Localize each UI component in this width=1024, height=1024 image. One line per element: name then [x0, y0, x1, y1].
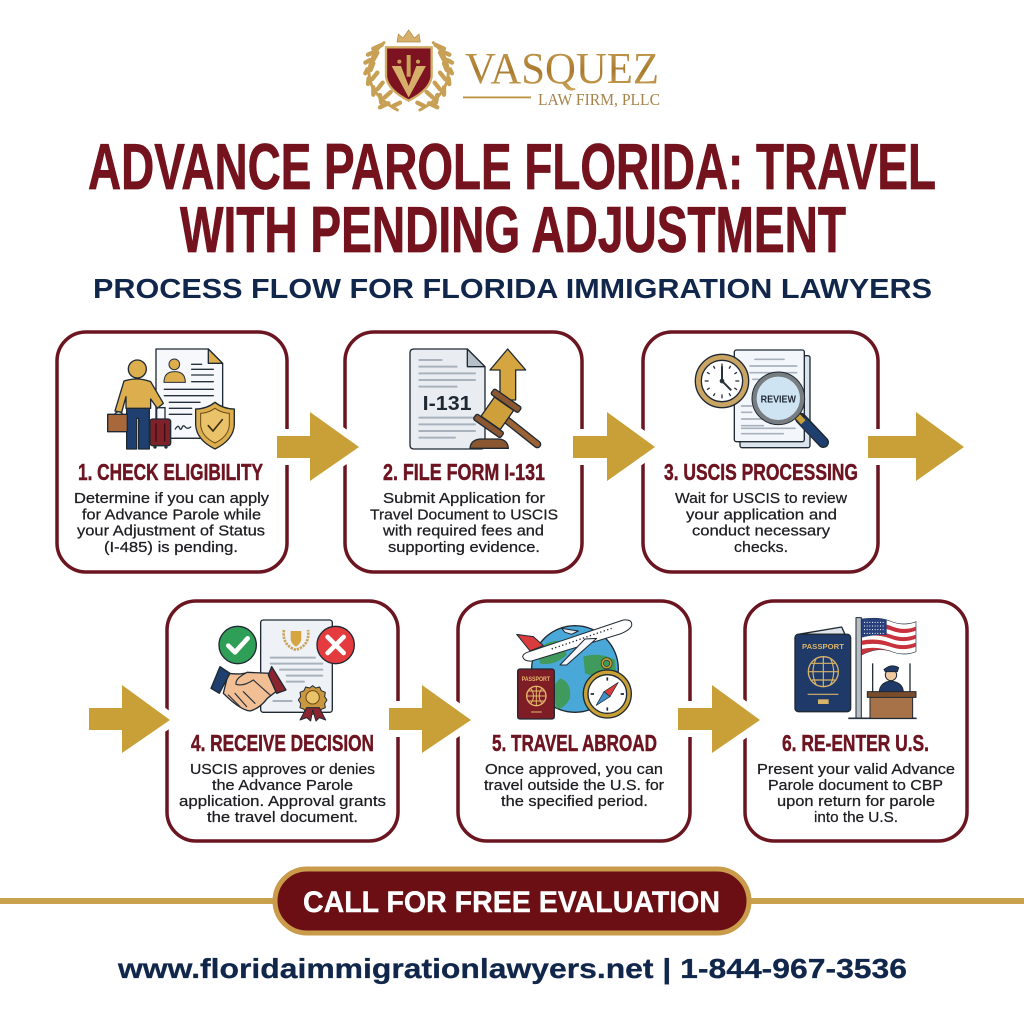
arrow: step 5 to 6	[678, 685, 760, 753]
heading: 4. RECEIVE DECISION	[191, 730, 374, 756]
description: USCIS approves or denies	[190, 761, 375, 778]
arrow: step 4 to 5	[389, 685, 471, 753]
subtitle: PROCESS FLOW FOR FLORIDA IMMIGRATION LAWYERS	[93, 273, 932, 304]
description: for Advance Parole while	[82, 506, 261, 524]
icon: clock, documents and magnifier	[695, 350, 823, 448]
description: your Adjustment of Status	[77, 522, 265, 540]
title	[88, 130, 936, 266]
panel: step 2 file form I-131	[345, 332, 582, 572]
description: conduct necessary	[692, 522, 831, 540]
divider line behind call to action	[0, 898, 1024, 904]
icon: clock, documents and magnifier: REVIEW	[761, 394, 796, 405]
icon: passport, flag and border officer: PASSPORT	[802, 642, 845, 651]
call to action button	[275, 869, 749, 933]
logo: Vasquez Law Firm	[365, 30, 660, 110]
arrow: step 2 to 3	[573, 412, 655, 481]
description: Travel Document to USCIS	[370, 506, 558, 524]
description: the specified period.	[501, 793, 648, 810]
description: upon return for parole	[777, 793, 935, 810]
icon: globe, airplane, passport and compass	[517, 620, 632, 719]
icon: form I-131, upload arrow and gavel: I-131	[423, 392, 472, 415]
logo wordmark: VASQUEZ	[465, 44, 659, 93]
description	[484, 761, 664, 810]
description	[757, 761, 955, 826]
description: checks.	[734, 539, 788, 556]
icon: passport, flag and border officer	[795, 618, 917, 718]
panel: step 1 check eligibility	[57, 332, 287, 572]
description: the travel document.	[207, 809, 358, 826]
description: supporting evidence.	[388, 539, 540, 556]
description: (I-485) is pending.	[104, 539, 238, 556]
description: application. Approval grants	[179, 793, 386, 810]
description: your application and	[686, 506, 837, 524]
logo emblem: crest with laurels	[365, 30, 452, 110]
arrow: step 3 onward	[868, 412, 964, 481]
icon: form I-131, upload arrow and gavel	[410, 349, 537, 449]
icon: decision document, handshake, approve and deny marks	[211, 620, 354, 721]
description: with required fees and	[382, 522, 544, 540]
heading: 6. RE-ENTER U.S.	[782, 730, 929, 756]
panel: step 6 re-enter U.S.	[745, 601, 967, 841]
description: into the U.S.	[814, 809, 898, 826]
panel: step 4 receive decision	[167, 601, 398, 841]
description: Present your valid Advance	[757, 761, 955, 778]
footer contact line: www.floridaimmigrationlawyers.net | 1-844-967-3536	[117, 953, 907, 984]
call to action button: CALL FOR FREE EVALUATION	[303, 886, 720, 919]
logo tagline: LAW FIRM, PLLC	[538, 90, 660, 109]
description: Submit Application for	[383, 490, 545, 507]
icon: traveler with document and shield	[108, 349, 234, 449]
heading: 2. FILE FORM I-131	[383, 459, 545, 485]
description: travel outside the U.S. for	[484, 777, 664, 794]
description	[74, 490, 270, 556]
description: the Advance Parole	[212, 777, 353, 794]
description: Once approved, you can	[485, 761, 663, 778]
description: Parole document to CBP	[768, 777, 943, 794]
icon: globe, airplane, passport and compass: PASSPORT	[522, 676, 550, 683]
panel: step 5 travel abroad	[458, 601, 690, 841]
heading: 3. USCIS PROCESSING	[664, 459, 858, 485]
heading: 1. CHECK ELIGIBILITY	[78, 459, 263, 485]
arrow: into step 4	[89, 685, 170, 753]
description	[370, 490, 558, 556]
description	[675, 490, 847, 556]
heading: 5. TRAVEL ABROAD	[492, 730, 657, 756]
description: Wait for USCIS to review	[675, 490, 847, 507]
description: Determine if you can apply	[74, 490, 270, 507]
description	[179, 761, 386, 826]
panel: step 3 USCIS processing	[643, 332, 878, 572]
arrow: step 1 to 2	[277, 412, 359, 481]
